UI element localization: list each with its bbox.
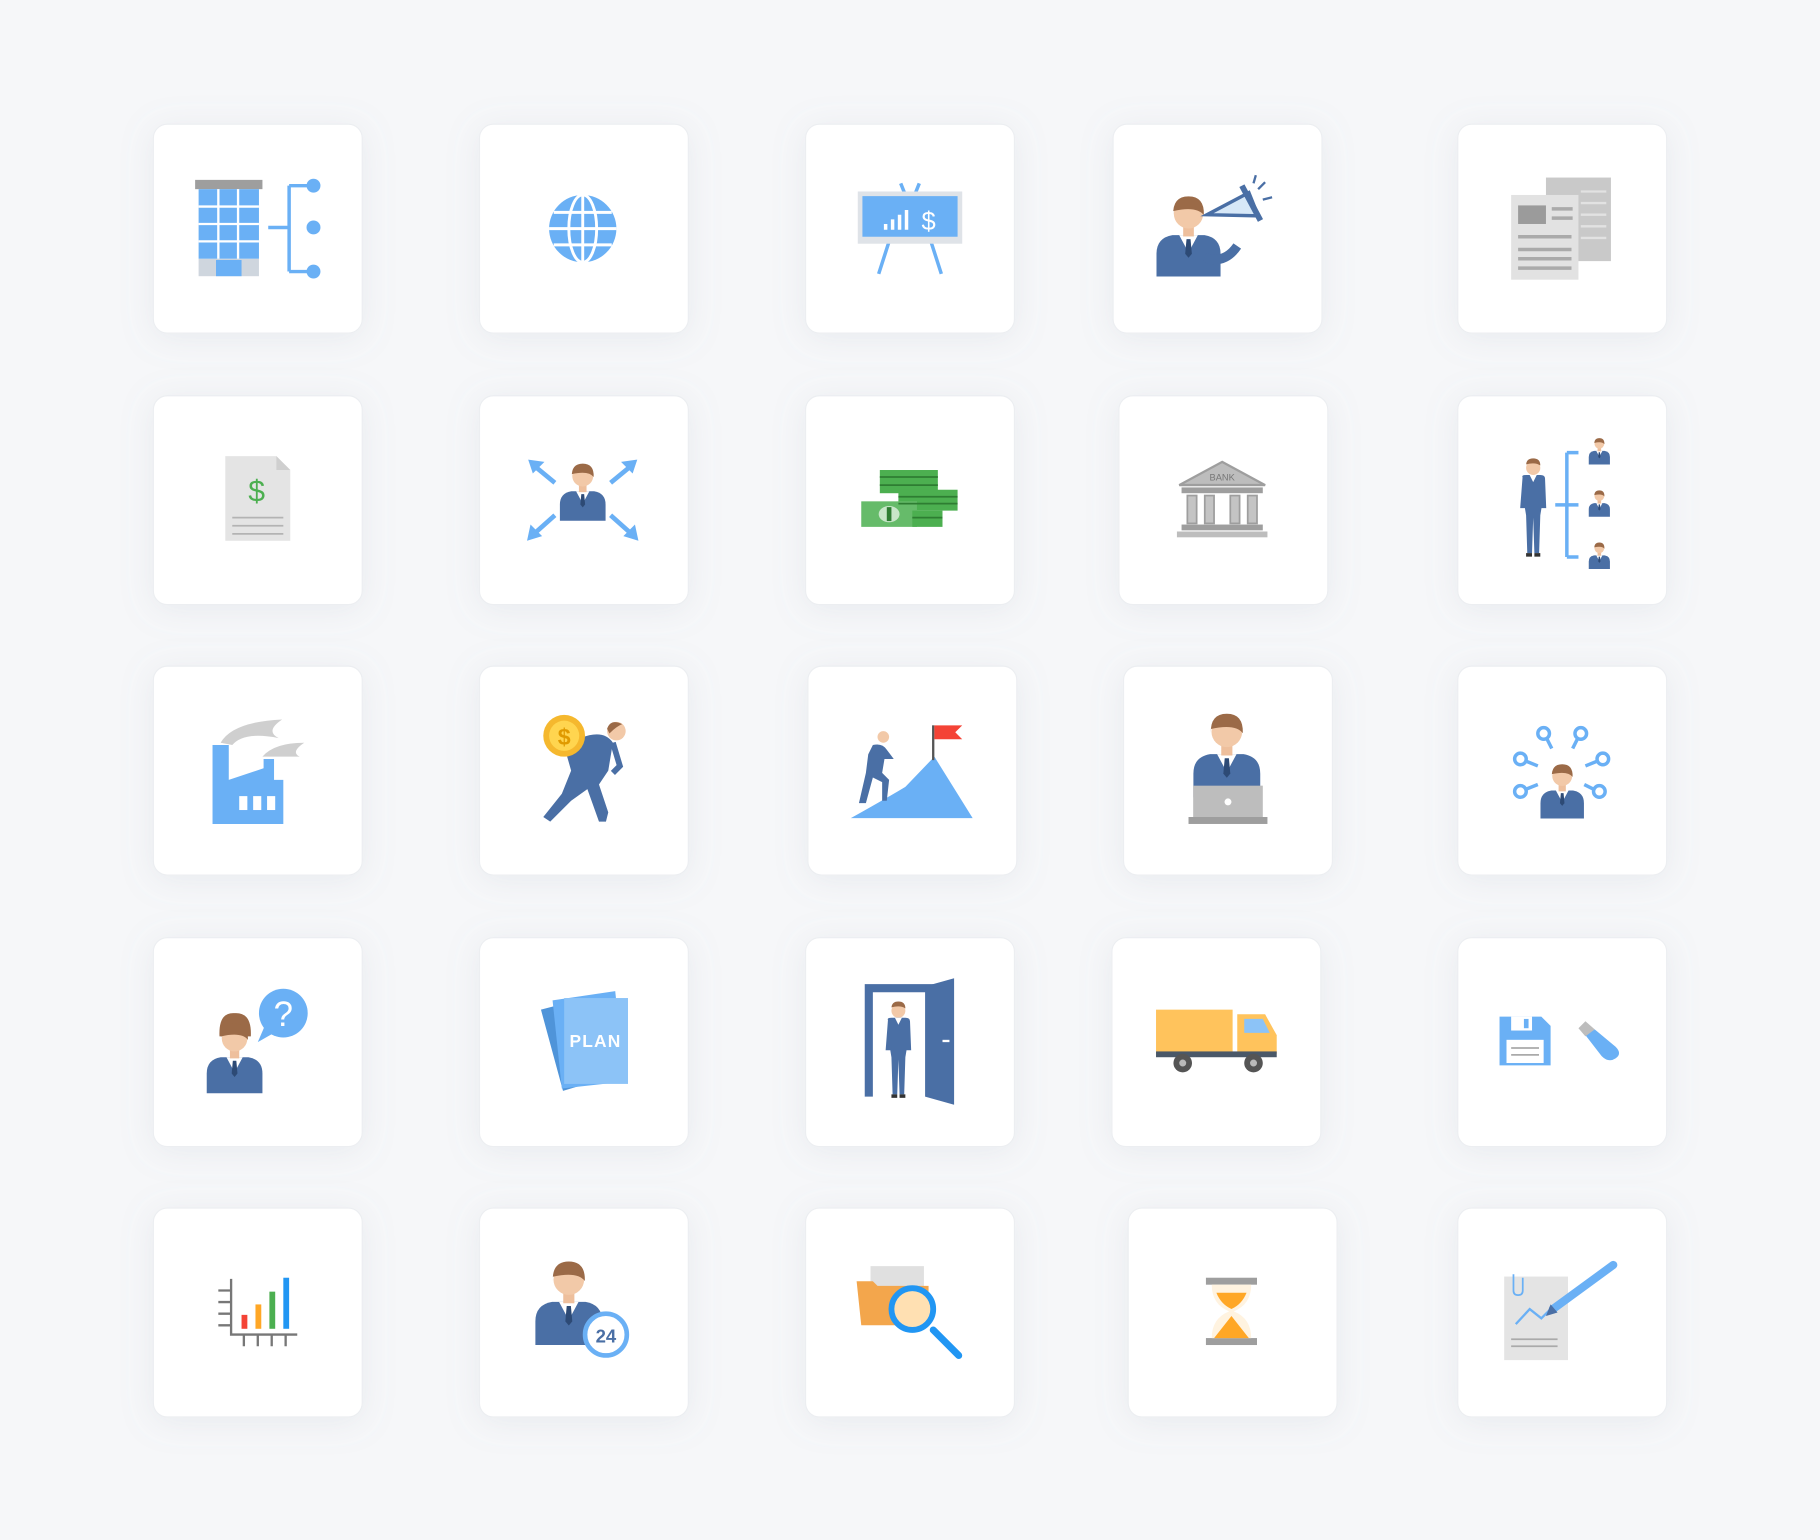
card: building hierarchy bbox=[153, 124, 362, 333]
card: bank bbox=[1119, 396, 1328, 605]
card: document with pen bbox=[1458, 1208, 1667, 1417]
card: truck bbox=[1112, 938, 1321, 1147]
card: plan folders: PLAN bbox=[570, 1031, 621, 1051]
card: woman question: ? bbox=[274, 995, 293, 1034]
card: invoice: $ bbox=[248, 475, 265, 508]
card: man megaphone bbox=[1113, 124, 1322, 333]
card: climbing mountain bbox=[808, 666, 1017, 875]
card: woman question bbox=[153, 938, 362, 1147]
card: man in doorway bbox=[806, 938, 1014, 1147]
card: floppy and usb bbox=[1458, 938, 1667, 1147]
card grid bbox=[153, 124, 1667, 1417]
card: man carrying coin bbox=[479, 666, 688, 875]
card: folder search bbox=[806, 1208, 1014, 1417]
card: newspapers bbox=[1458, 124, 1667, 333]
card: globe bbox=[479, 124, 688, 333]
card: bar chart bbox=[153, 1208, 362, 1417]
card: bank: BANK bbox=[1210, 472, 1236, 482]
card: plan folders bbox=[479, 938, 688, 1147]
card: man network bbox=[1458, 666, 1667, 875]
card: man 24 hours bbox=[479, 1208, 688, 1417]
card: man 24 hours: 24 bbox=[596, 1326, 617, 1347]
card: hourglass bbox=[1128, 1208, 1337, 1417]
card: factory bbox=[153, 666, 362, 875]
card: man with arrows bbox=[479, 396, 688, 605]
card: easel presentation: $ bbox=[921, 208, 936, 236]
card: easel presentation bbox=[806, 124, 1014, 333]
card: team hierarchy bbox=[1458, 396, 1667, 605]
card: man carrying coin: $ bbox=[558, 724, 571, 750]
card: invoice bbox=[153, 396, 362, 605]
card: money stacks bbox=[806, 396, 1014, 605]
card: man laptop bbox=[1124, 666, 1332, 875]
